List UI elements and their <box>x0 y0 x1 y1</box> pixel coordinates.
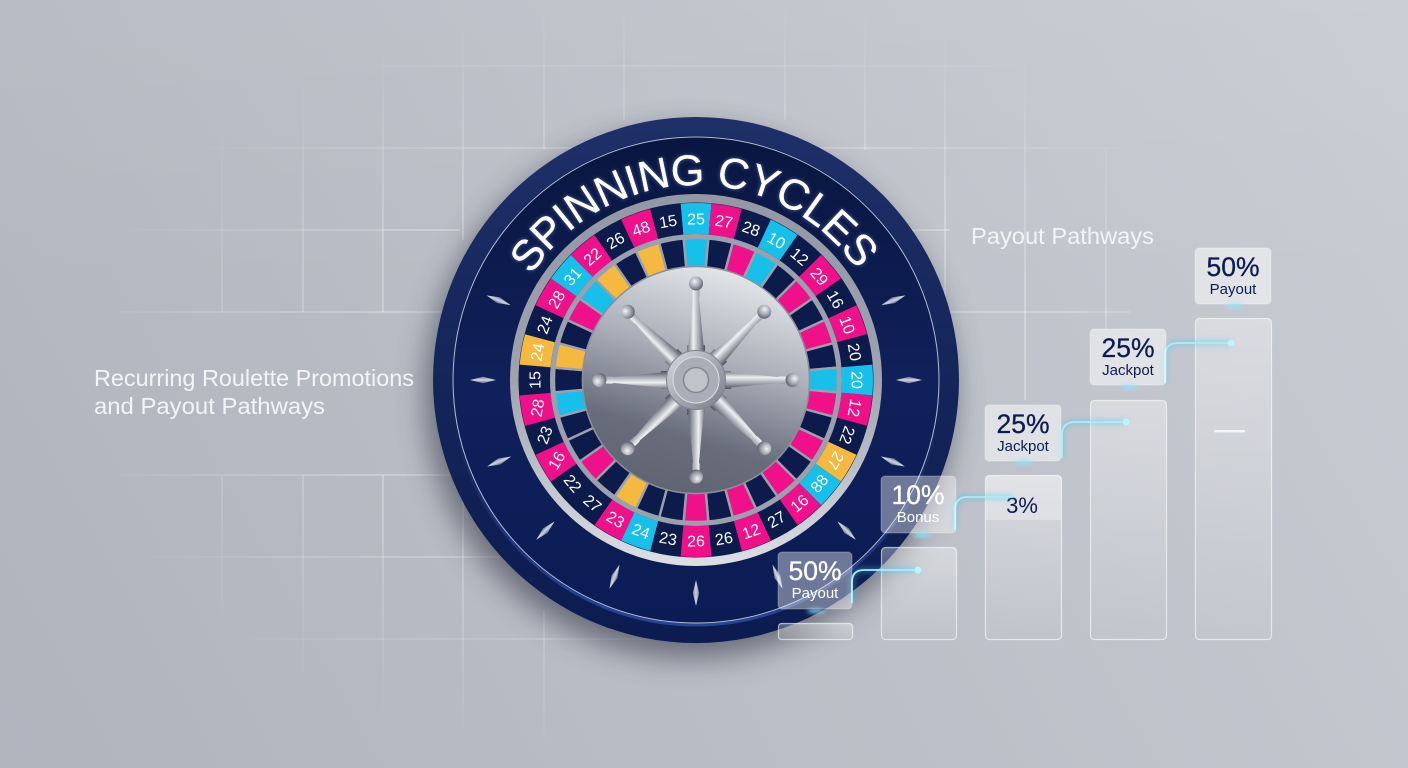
label: 10% bonus <box>881 476 956 537</box>
pocket numbers: 27 <box>765 508 789 532</box>
hub boss <box>666 350 726 410</box>
bar 4 <box>1090 400 1166 640</box>
label: 25% jackpot: Jackpot <box>997 438 1050 455</box>
pocket numbers: 26 <box>714 530 734 549</box>
pocket numbers: 28 <box>546 288 569 312</box>
inner pocket ring <box>550 234 842 526</box>
pocket numbers: 28 <box>529 398 548 418</box>
connector 4 <box>1165 340 1234 383</box>
pocket numbers: 23 <box>603 508 627 532</box>
label: 25% jackpot upper <box>1090 329 1166 389</box>
label: 25% jackpot: 25% <box>996 409 1050 439</box>
outer pocket ring <box>518 202 874 558</box>
label: 25% jackpot upper: 25% <box>1101 333 1155 363</box>
pocket numbers: 16 <box>823 288 846 312</box>
pocket numbers: 29 <box>806 265 831 290</box>
pocket numbers: 10 <box>835 314 857 337</box>
pocket numbers: 27 <box>580 492 604 516</box>
pocket numbers: 27 <box>714 213 734 232</box>
rim markers <box>470 292 922 606</box>
pocket numbers: 88 <box>808 472 832 496</box>
pocket numbers: 48 <box>630 219 653 241</box>
label: 10% bonus: 10% <box>891 480 945 510</box>
background grid <box>120 5 1130 740</box>
pocket numbers: 27 <box>823 448 846 472</box>
pocket numbers: 25 <box>687 212 705 228</box>
label: 50% payout <box>778 552 852 613</box>
hub spokes <box>592 276 800 484</box>
label: 50% payout upper <box>1195 248 1271 308</box>
label: 50% payout upper: Payout <box>1210 281 1257 298</box>
label: 50% payout: Payout <box>792 585 839 602</box>
pocket numbers: 22 <box>560 472 584 496</box>
heading: payout pathways: Payout Pathways <box>971 223 1154 249</box>
connector 2 <box>955 497 1013 530</box>
pocket numbers: 24 <box>535 314 557 337</box>
bar 1 <box>778 624 852 640</box>
label: 10% bonus: Bonus <box>897 509 939 526</box>
pocket numbers: 16 <box>546 449 569 473</box>
title: Spinning Cycles: SPINNING CYCLES <box>510 152 878 272</box>
bar 5 <box>1196 318 1272 640</box>
pocket numbers: 24 <box>629 521 652 543</box>
pocket numbers: 20 <box>848 371 864 389</box>
pocket numbers: 22 <box>581 245 606 270</box>
pocket numbers: 26 <box>604 230 628 253</box>
pocket numbers: 23 <box>658 530 678 549</box>
label: 25% jackpot upper: Jackpot <box>1102 362 1155 379</box>
wheel rim <box>433 117 959 643</box>
bar 3: 3% <box>1006 493 1038 518</box>
pocket numbers: 15 <box>528 371 544 389</box>
pocket numbers: 20 <box>844 342 864 363</box>
pocket numbers: 16 <box>788 492 812 516</box>
pocket numbers: 15 <box>658 212 679 232</box>
label: 50% payout: 50% <box>788 556 842 586</box>
pocket numbers: 12 <box>740 521 763 543</box>
pocket numbers: 23 <box>535 424 557 447</box>
bar 2 <box>882 548 956 640</box>
payout bar chart <box>778 318 1272 640</box>
bar 3 <box>986 476 1062 640</box>
pocket numbers: 10 <box>764 230 788 253</box>
pocket numbers: 26 <box>687 534 705 550</box>
pocket numbers: 28 <box>739 219 762 241</box>
connector 1 <box>852 566 922 603</box>
subtitle: recurring roulette promotions: Recurring Roulette Promotions <box>94 365 414 391</box>
wheel drop shadow <box>426 130 954 658</box>
pocket numbers: 31 <box>561 265 586 289</box>
wheel face <box>451 135 941 625</box>
label: 25% jackpot <box>985 405 1061 464</box>
connector 3 <box>1062 418 1130 458</box>
steel hub <box>582 266 810 494</box>
subtitle: recurring roulette promotions <box>94 365 414 419</box>
pocket numbers: 12 <box>844 398 863 418</box>
pocket numbers: 12 <box>787 245 811 270</box>
pocket numbers <box>528 212 865 550</box>
silver outer ring <box>510 194 882 566</box>
roulette wheel <box>433 117 959 643</box>
pocket numbers: 24 <box>529 342 548 362</box>
pocket numbers: 22 <box>835 423 857 446</box>
subtitle: recurring roulette promotions: and Payout Pathways <box>94 393 325 419</box>
label: 50% payout upper: 50% <box>1206 252 1260 282</box>
